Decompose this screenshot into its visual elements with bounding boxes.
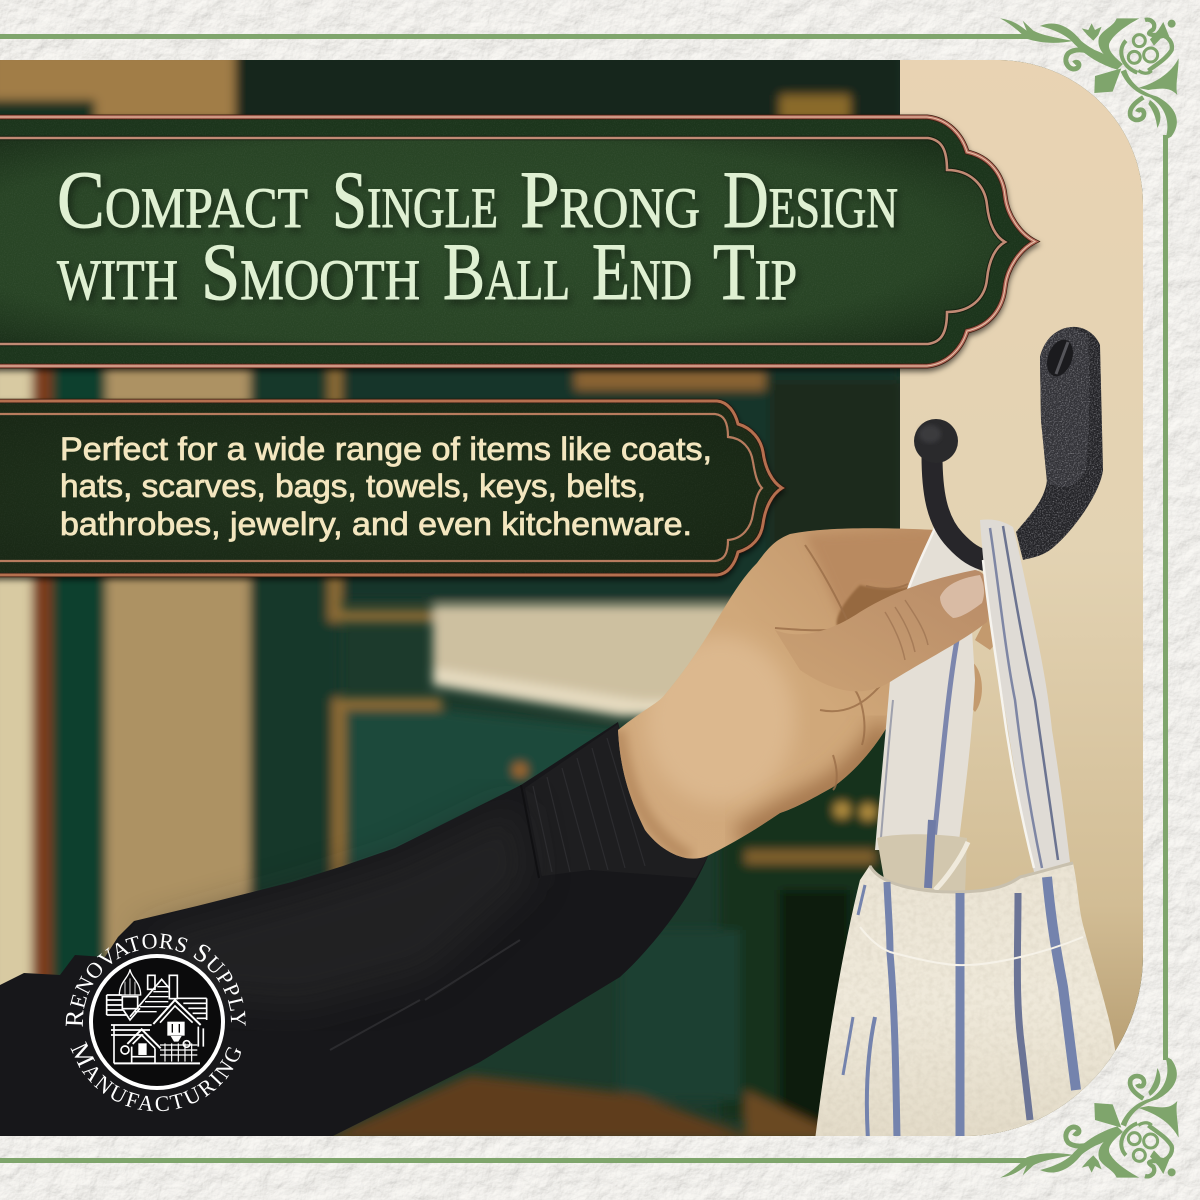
title text: Smooth bbox=[201, 226, 420, 317]
title text: Prong bbox=[520, 154, 700, 245]
title text: with bbox=[57, 226, 178, 317]
wrought iron hook bbox=[914, 327, 1103, 562]
description banner bbox=[0, 400, 790, 578]
description text: bathrobes, jewelry, and even kitchenware. bbox=[60, 506, 692, 542]
thumb and thumbnail bbox=[775, 570, 990, 691]
cream wall bbox=[900, 55, 1150, 1145]
left towel strap bbox=[875, 528, 985, 850]
right towel strap over hook bbox=[980, 519, 1070, 872]
title text bbox=[57, 154, 898, 317]
title text: Ball bbox=[443, 226, 570, 317]
description text: hats, scarves, bags, towels, keys, belts, bbox=[60, 468, 646, 504]
logo house bbox=[107, 969, 207, 1063]
title text: Tip bbox=[713, 226, 797, 317]
title banner bbox=[0, 117, 1040, 367]
black sleeve bbox=[0, 722, 708, 1140]
title text: Design bbox=[723, 154, 898, 245]
hand palm and fingers bbox=[618, 528, 998, 859]
ornament: bottom right corner bbox=[1000, 1056, 1179, 1178]
logo arc text bbox=[66, 934, 246, 1112]
logo arc text: RENOVATORS SUPPLY bbox=[66, 934, 246, 1027]
description plate bbox=[0, 401, 782, 575]
logo arc text: MANUFACTURING bbox=[70, 1041, 241, 1112]
title text: End bbox=[592, 226, 692, 317]
inner plate bbox=[0, 138, 1005, 344]
title text: Single bbox=[332, 154, 498, 245]
logo: Renovators Supply Manufacturing bbox=[66, 934, 246, 1112]
towel body with stripes bbox=[816, 820, 1116, 1136]
description text: Perfect for a wide range of items like coats, bbox=[60, 431, 712, 467]
ornament: top right corner bbox=[1000, 18, 1179, 140]
banner plate bbox=[0, 117, 1035, 366]
description text bbox=[60, 431, 712, 542]
description inner plate bbox=[0, 414, 762, 561]
title text: Compact bbox=[57, 154, 308, 245]
